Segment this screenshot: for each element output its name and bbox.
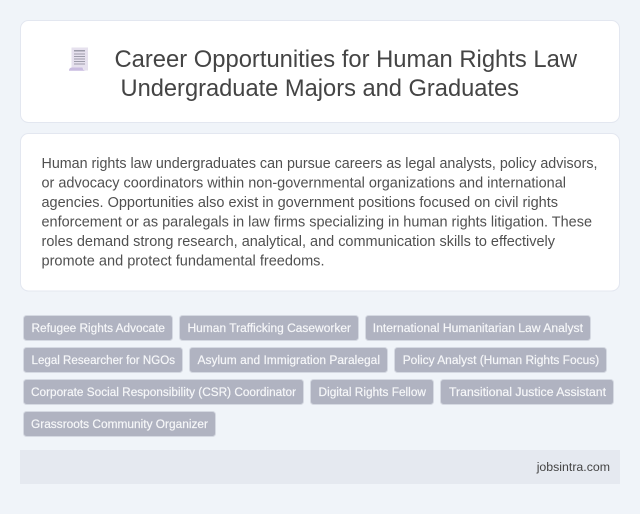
tag: Digital Rights Fellow: Digital Rights Fellow xyxy=(318,385,426,399)
tag: Asylum and Immigration Paralegal xyxy=(190,348,388,372)
panel: description card xyxy=(20,134,620,291)
career tags xyxy=(24,316,614,436)
title xyxy=(114,46,577,102)
tag: Refugee Rights Advocate xyxy=(24,316,172,340)
tag: International Humanitarian Law Analyst: International Humanitarian Law Analyst xyxy=(373,321,584,335)
description text: roles demand strong research, analytical, and communication skills to effectively xyxy=(42,234,556,250)
tag: Asylum and Immigration Paralegal: Asylum and Immigration Paralegal xyxy=(198,353,380,367)
tag: Human Trafficking Caseworker: Human Trafficking Caseworker xyxy=(188,321,351,335)
tag: Policy Analyst (Human Rights Focus) xyxy=(394,348,606,372)
description text xyxy=(42,156,598,270)
tag: Human Trafficking Caseworker xyxy=(180,316,358,340)
tag: Transitional Justice Assistant xyxy=(440,380,614,404)
description text: enforcement or as paralegals in law firms specializing in human rights litigation. These xyxy=(42,214,592,230)
tag: International Humanitarian Law Analyst xyxy=(366,316,590,340)
tag: Corporate Social Responsibility (CSR) Coordinator: Corporate Social Responsibility (CSR) Coordinator xyxy=(31,385,296,399)
footer bar: jobsintra.com xyxy=(536,460,610,474)
tag: Grassroots Community Organizer xyxy=(24,412,216,436)
footer bar xyxy=(20,450,620,484)
tag: Legal Researcher for NGOs xyxy=(24,348,182,372)
description text: Human rights law undergraduates can pursue careers as legal analysts, policy advisors, xyxy=(42,156,598,172)
tag: Corporate Social Responsibility (CSR) Coordinator xyxy=(24,380,304,404)
tag: Transitional Justice Assistant: Transitional Justice Assistant xyxy=(449,385,607,399)
description text: agencies. Opportunities also exist in government positions focused on civil rights xyxy=(42,195,558,211)
panel: header card xyxy=(20,20,620,122)
description text: promote and protect fundamental freedoms. xyxy=(42,254,324,270)
title: Undergraduate Majors and Graduates xyxy=(120,75,519,102)
title: Career Opportunities for Human Rights Law xyxy=(114,46,577,73)
icon: document scroll xyxy=(69,48,88,71)
tag: Legal Researcher for NGOs: Legal Researcher for NGOs xyxy=(32,353,175,367)
tag: Grassroots Community Organizer: Grassroots Community Organizer xyxy=(31,417,208,431)
tag: Digital Rights Fellow xyxy=(310,380,434,404)
description text: or advocacy coordinators within non-governmental organizations and international xyxy=(42,176,566,192)
tag: Refugee Rights Advocate: Refugee Rights Advocate xyxy=(32,321,165,335)
tag: Policy Analyst (Human Rights Focus): Policy Analyst (Human Rights Focus) xyxy=(403,353,599,367)
